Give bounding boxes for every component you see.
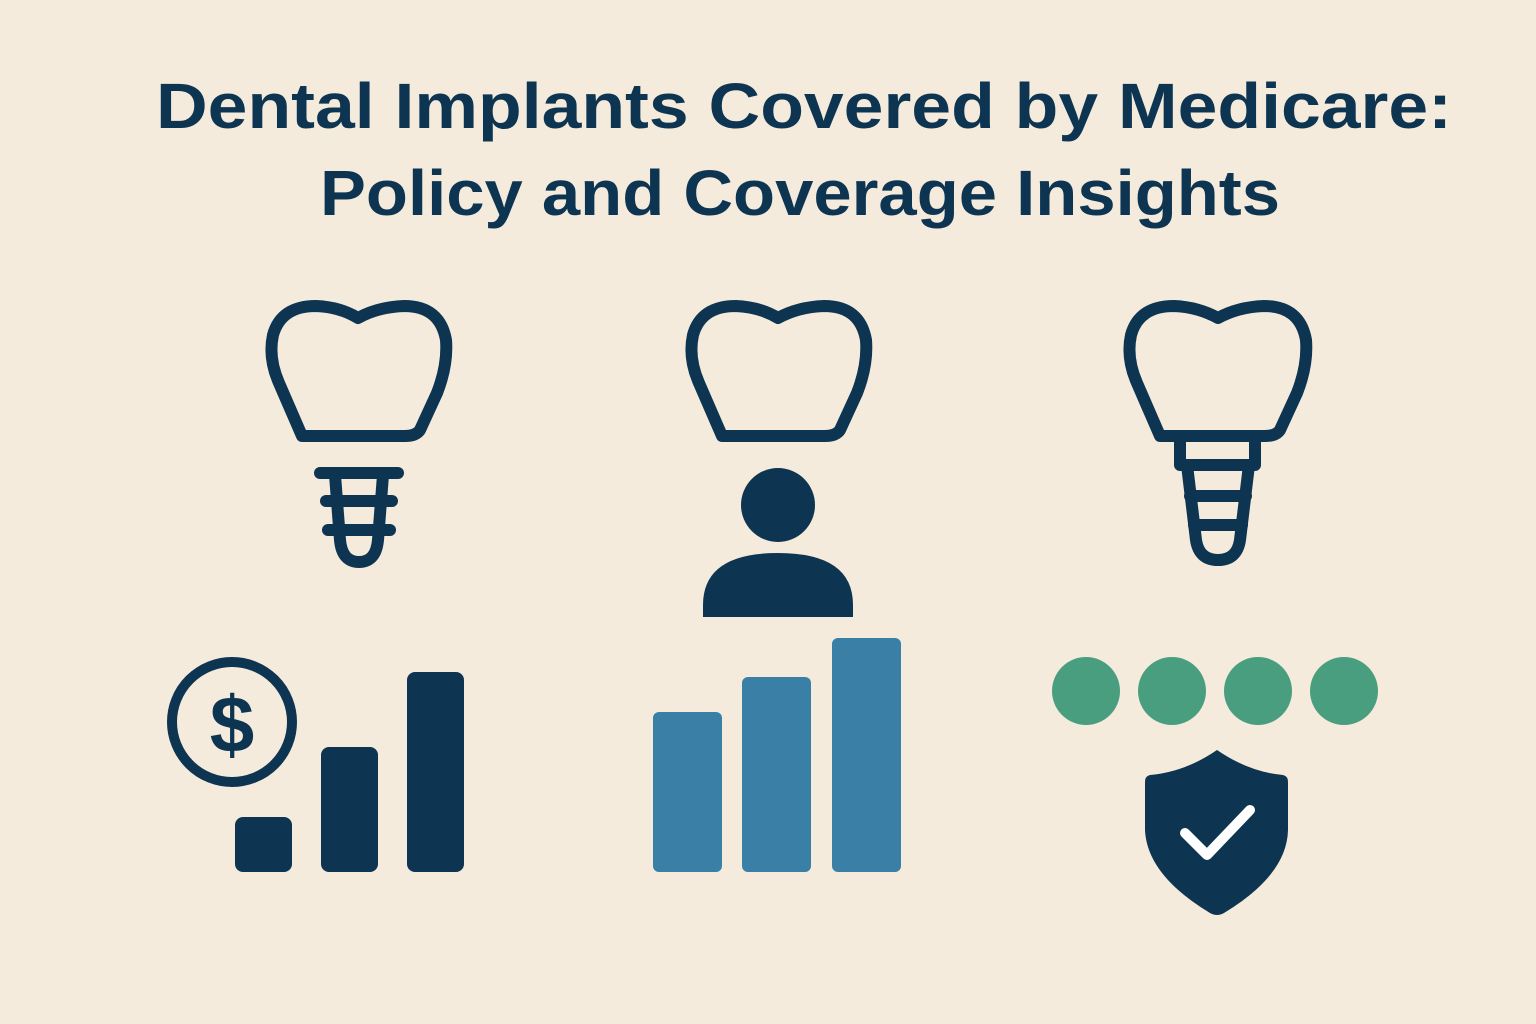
icon: dollar cost chart: $: [210, 680, 254, 769]
icon: green dots: [1052, 657, 1378, 725]
icon: shield check: [1145, 750, 1288, 915]
title: Dental Implants Covered by Medicare:: [156, 70, 1452, 142]
icon: dollar cost chart: [172, 662, 464, 872]
bar chart: blue: [653, 638, 901, 872]
title: [156, 70, 1452, 229]
icon: implant tooth left: [271, 306, 446, 562]
icon: tooth with person: [691, 306, 866, 617]
icon: implant tooth right: [1129, 306, 1306, 560]
title: Policy and Coverage Insights: [320, 157, 1280, 229]
